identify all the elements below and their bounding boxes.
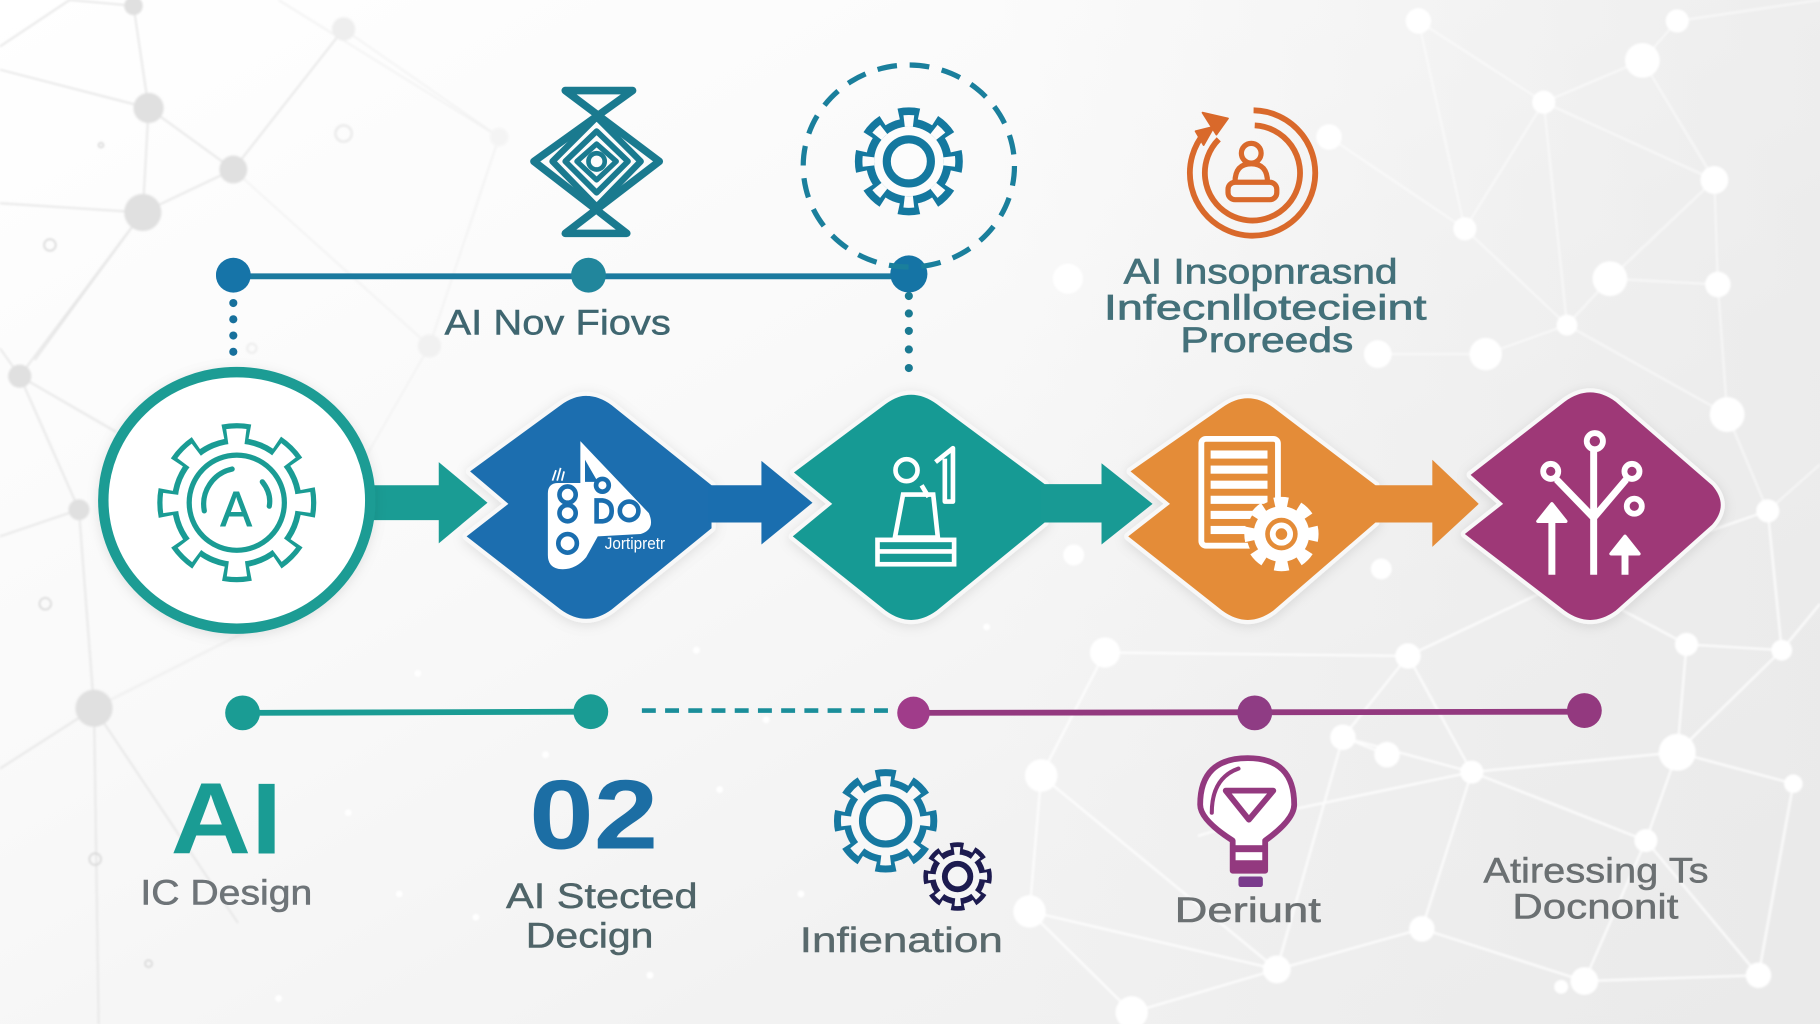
bottom timeline connector: [225, 693, 1602, 730]
icon: white tree: [1538, 433, 1642, 575]
node: top left: [216, 258, 251, 293]
arrow: teal from circle to blue: [369, 462, 488, 543]
label: AI IC Design: AI: [171, 763, 282, 875]
label: AI IC Design: [140, 763, 312, 912]
node: bottom 1: [225, 695, 260, 730]
label: 02 AI Stected Decign: Decign: [526, 916, 653, 955]
label: Atiressing Ts Docnonit: [1483, 851, 1709, 926]
heading: AI Nov Fiovs: AI Nov Fiovs: [445, 303, 671, 342]
node: bottom 4: [1237, 695, 1272, 730]
icon: document and gear: [1201, 439, 1316, 569]
label: 02 AI Stected Decign: 02: [529, 760, 658, 870]
panel: orange diamond step: [1128, 398, 1375, 620]
dotted connector right: [905, 292, 913, 372]
label: Atiressing Ts Docnonit: Atiressing Ts: [1483, 851, 1709, 890]
top timeline connector: [216, 255, 927, 372]
node: bottom 2: [573, 694, 608, 729]
label: AI IC Design: IC Design: [140, 873, 312, 912]
node: top middle: [571, 258, 606, 293]
arrow: orange to purple: [1372, 460, 1479, 547]
panel: teal diamond step: [793, 395, 1045, 620]
icon: white tower: [878, 448, 954, 564]
panel: purple diamond step: [1465, 392, 1721, 620]
heading: AI Insopnrasnd Infecnllotecieint Proreeds: Proreeds: [1180, 321, 1353, 360]
heading: AI Insopnrasnd Infecnllotecieint Proreeds: Infecnllotecieint: [1104, 288, 1427, 327]
heading: AI Insopnrasnd Infecnllotecieint Proreeds: [1104, 252, 1427, 360]
label: Infienation: Infienation: [800, 921, 1003, 960]
node: bottom 3: [897, 697, 930, 729]
icon: white shape with circles: [548, 441, 666, 569]
icon: lightbulb: [1200, 758, 1294, 887]
icon: gear in dashed circle: [803, 65, 1014, 267]
label: Atiressing Ts Docnonit: Docnonit: [1512, 887, 1679, 926]
panel: white circle with AI gear: [103, 372, 370, 629]
label: 02 AI Stected Decign: [506, 760, 698, 955]
icon: white shape with circles: Jortipretr: [605, 535, 666, 553]
arrow: blue to teal: [708, 461, 812, 545]
label: 02 AI Stected Decign: AI Stected: [506, 877, 698, 916]
arrow: teal to orange: [1041, 463, 1153, 545]
icon: AI gear: [166, 432, 308, 574]
panel: blue diamond step: [467, 396, 712, 619]
dashed link: [642, 709, 894, 713]
icon: nested diamond hourglass: [534, 91, 659, 233]
icon: AI gear: A: [221, 483, 252, 537]
node: bottom 5: [1567, 693, 1602, 728]
node: top right: [890, 255, 927, 293]
icon: two gears: [840, 775, 988, 907]
icon: orange person with circular arrow: [1190, 110, 1315, 236]
label: Deriunt: Deriunt: [1175, 891, 1321, 930]
heading: AI Insopnrasnd Infecnllotecieint Proreeds: AI Insopnrasnd: [1124, 252, 1398, 291]
dotted connector left: [229, 299, 237, 356]
